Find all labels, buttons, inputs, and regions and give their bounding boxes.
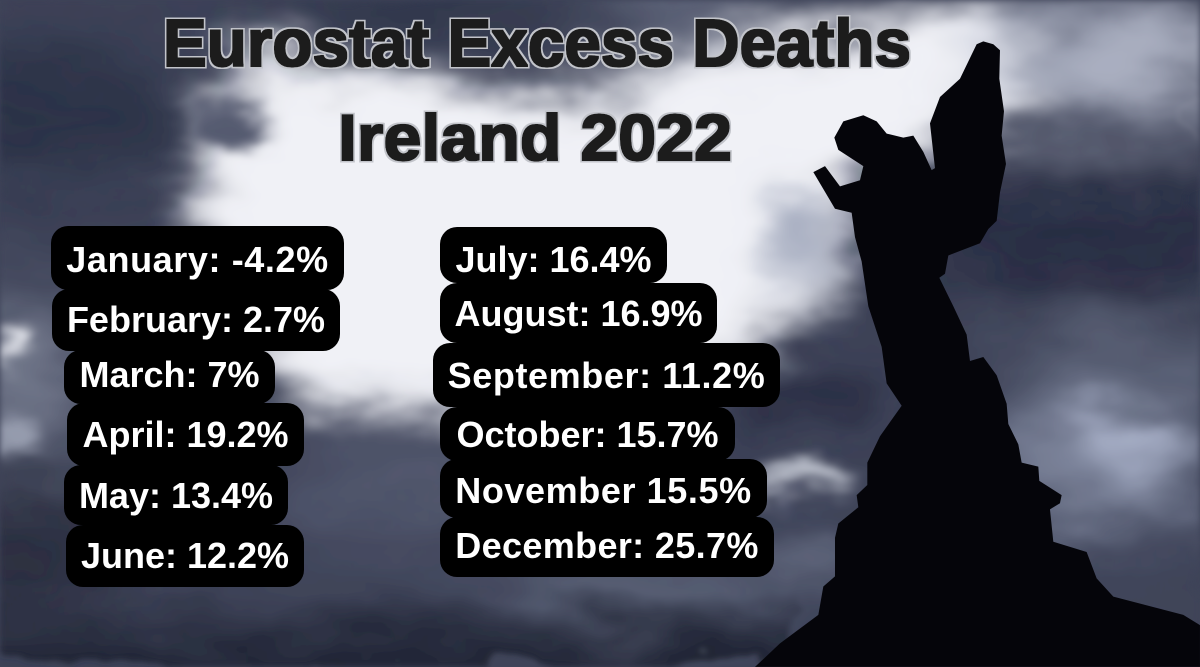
month November: November 15.5% xyxy=(455,470,752,510)
month June: June: 12.2% xyxy=(81,534,289,576)
month February: February: 2.7% xyxy=(67,298,325,340)
title: Ireland 2022 xyxy=(338,101,732,174)
month August xyxy=(440,283,717,343)
month April xyxy=(67,403,304,466)
month September: September: 11.2% xyxy=(448,354,765,396)
month March: March: 7% xyxy=(79,354,260,394)
month October xyxy=(440,407,735,461)
month May: May: 13.4% xyxy=(79,474,273,516)
month February xyxy=(52,289,340,351)
month January: January: -4.2% xyxy=(66,238,329,280)
month August: August: 16.9% xyxy=(454,292,703,334)
month September xyxy=(433,343,780,407)
month December: December: 25.7% xyxy=(455,524,759,566)
title: Eurostat Excess Deaths xyxy=(163,6,911,81)
month March xyxy=(64,350,275,404)
title xyxy=(163,6,911,174)
month October: October: 15.7% xyxy=(456,414,719,454)
month May xyxy=(64,465,288,525)
month July: July: 16.4% xyxy=(455,238,652,280)
month November xyxy=(440,459,767,518)
month January xyxy=(51,226,344,290)
month April: April: 19.2% xyxy=(82,414,289,454)
month December xyxy=(440,517,774,577)
angel statue silhouette xyxy=(755,41,1200,667)
month June xyxy=(66,525,304,587)
month July xyxy=(440,227,667,283)
